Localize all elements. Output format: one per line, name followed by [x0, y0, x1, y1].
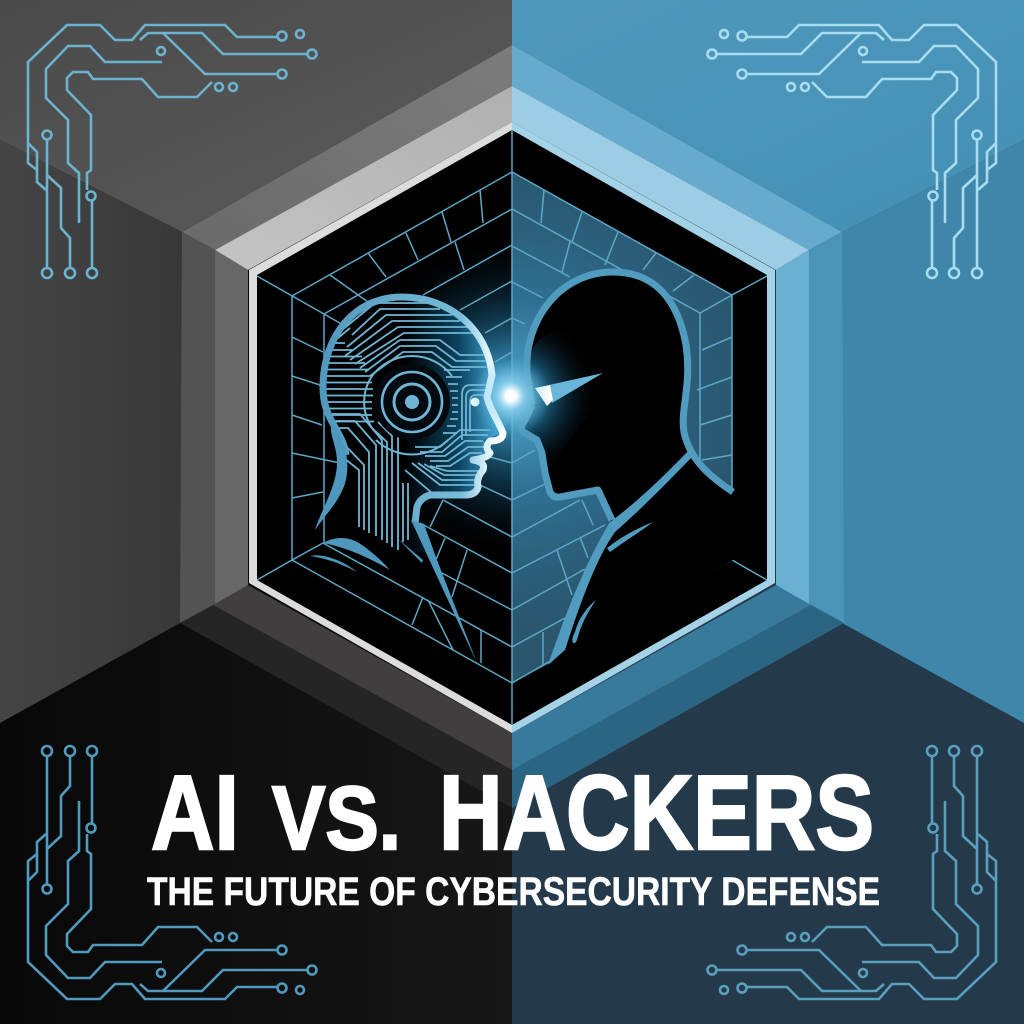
- figure: AI head profile: [310, 297, 503, 663]
- hacker eye glow: [520, 330, 600, 473]
- AI head fill: [323, 297, 503, 577]
- hexagon window: brick corridor: [257, 130, 767, 725]
- hacker outline: [522, 272, 733, 520]
- circuit traces: bottom left: [28, 746, 316, 999]
- title: VS.: [272, 769, 401, 869]
- AI head outline: [323, 297, 503, 523]
- circuit traces: bottom right: [708, 746, 996, 999]
- AI circuit brain lines: [325, 303, 490, 550]
- hacker white eye: [535, 385, 553, 406]
- background panel: left grey half: [0, 0, 512, 1024]
- circuit traces: top right: [708, 25, 996, 278]
- hexagon frame border: [249, 122, 775, 733]
- AI neck and back strands: [310, 422, 477, 663]
- brick grid lines: [257, 130, 767, 725]
- central glow backdrop: [324, 209, 512, 647]
- subtitle: THE FUTURE OF CYBERSECURITY DEFENSE: [147, 870, 880, 914]
- hacker eye wedge: [549, 373, 603, 403]
- hacker coat edge: [548, 449, 693, 665]
- right wall panel: [512, 172, 732, 683]
- title: HACKERS: [439, 754, 874, 872]
- title: AI: [151, 754, 239, 872]
- circuit traces: top left: [28, 25, 316, 278]
- AI target eye circuit: [364, 356, 480, 454]
- background panel: right blue half: [512, 0, 1024, 1024]
- hacker black silhouette: [520, 272, 733, 665]
- central light flare: [471, 356, 551, 436]
- hacker coat fold: [607, 522, 653, 552]
- title: [151, 754, 874, 872]
- figure: hacker silhouette: [520, 272, 733, 665]
- hacker coat seam: [572, 600, 596, 643]
